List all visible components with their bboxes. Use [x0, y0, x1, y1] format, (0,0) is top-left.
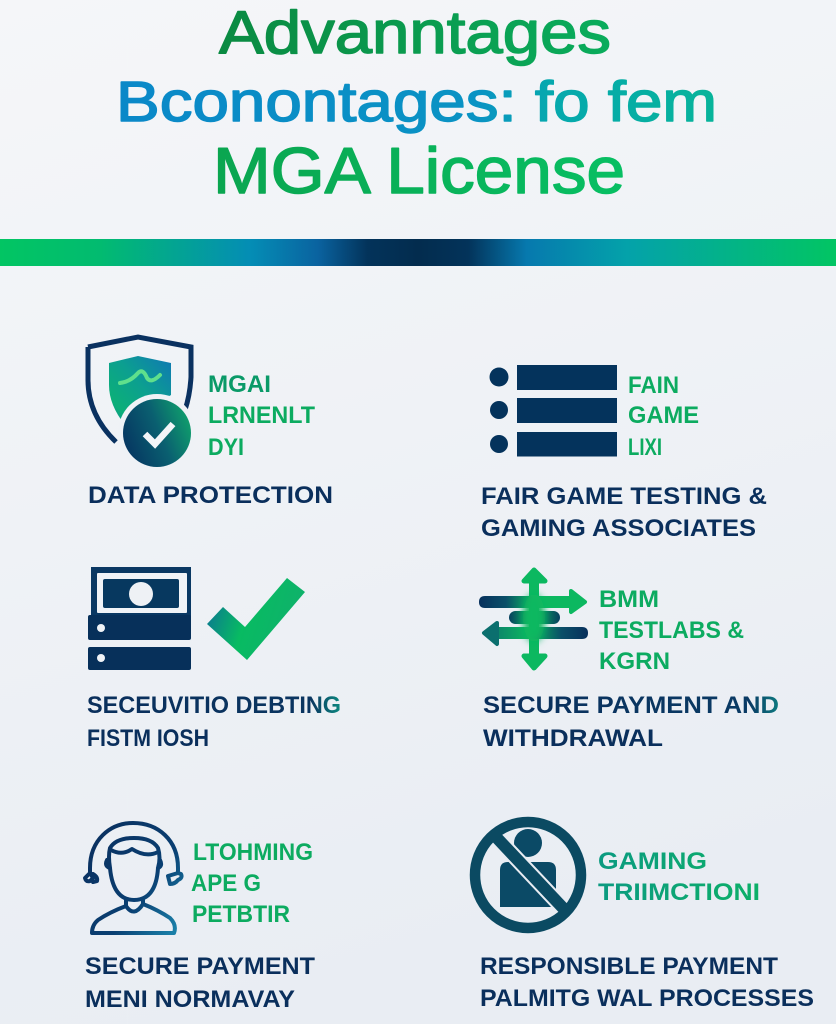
icon: shield with check badge [88, 337, 196, 472]
icon: person with headset [85, 823, 182, 933]
panel: data protection [88, 337, 333, 509]
icon: list with bullets and bars [490, 365, 617, 456]
label: MGAI LRNENLT DYI [208, 371, 315, 461]
heading: responsible payment processes: PALMITG WAL PROCESSES [480, 985, 814, 1012]
icon: server stack [88, 567, 191, 670]
panel: responsible gaming [475, 822, 814, 1012]
label: MGAI LRNENLT DYI: DYI [208, 434, 244, 461]
heading: fair game testing and gaming associates [481, 483, 767, 542]
gradient divider bar [0, 239, 836, 266]
label: LTOHMING APE G PETBTIR [191, 839, 313, 928]
heading: secure payment menu [85, 953, 315, 1013]
panel: fair game testing [481, 365, 767, 542]
panel: secure hosting [87, 567, 341, 752]
heading: secure payment and withdrawal: SECURE PAYMENT AND [483, 692, 779, 719]
heading: secure payment menu: MENI NORMAVAY [85, 986, 295, 1013]
heading: fair game testing and gaming associates: GAMING ASSOCIATES [481, 515, 756, 542]
label: LTOHMING APE G PETBTIR: PETBTIR [192, 901, 290, 928]
label: FAIN GAME LIXI: LIXI [628, 434, 662, 461]
heading: secure payment and withdrawal [483, 692, 779, 752]
label: BMM TESTLABS KGRN [599, 586, 744, 675]
panel: secure payment and withdrawal [479, 570, 779, 752]
heading: security hosting [87, 692, 341, 752]
title: Advanntages [219, 0, 611, 66]
heading: responsible payment processes [480, 953, 814, 1012]
label: GAMING TRIIMCTIONI: GAMING [598, 848, 707, 875]
heading: data protection: DATA PROTECTION [88, 482, 333, 509]
heading: security hosting: FISTM IOSH [87, 725, 209, 752]
label: LTOHMING APE G PETBTIR: LTOHMING [193, 839, 313, 866]
heading: secure payment and withdrawal: WITHDRAWAL [483, 725, 663, 752]
heading: responsible payment processes: RESPONSIBLE PAYMENT [480, 953, 778, 980]
label: GAMING TRIIMCTIONI: TRIIMCTIONI [598, 879, 760, 906]
label: FAIN GAME LIXI: FAIN [628, 372, 679, 399]
title: Bconontages: fo fem [116, 70, 717, 134]
label: BMM TESTLABS KGRN: BMM [599, 586, 659, 613]
label: BMM TESTLABS KGRN: KGRN [599, 648, 670, 675]
title [116, 0, 717, 207]
label: FAIN GAME LIXI [628, 372, 699, 461]
label: LTOHMING APE G PETBTIR: APE G [191, 870, 261, 897]
icon: crossing arrows [479, 570, 588, 668]
label: MGAI LRNENLT DYI: MGAI [208, 371, 271, 398]
icon: check mark [207, 578, 305, 660]
label: MGAI LRNENLT DYI: LRNENLT [208, 402, 315, 429]
panel: support person [85, 823, 315, 1013]
title: MGA License [213, 134, 625, 207]
heading: fair game testing and gaming associates: FAIR GAME TESTING & [481, 483, 767, 510]
label: FAIN GAME LIXI: GAME [628, 402, 699, 429]
icon: prohibited person [475, 822, 581, 928]
heading: security hosting: SECEUVITIO DEBTING [87, 692, 341, 719]
label: BMM TESTLABS KGRN: TESTLABS & [599, 617, 744, 644]
label: GAMING TRIIMCTIONI [598, 848, 760, 906]
heading: secure payment menu: SECURE PAYMENT [85, 953, 315, 980]
